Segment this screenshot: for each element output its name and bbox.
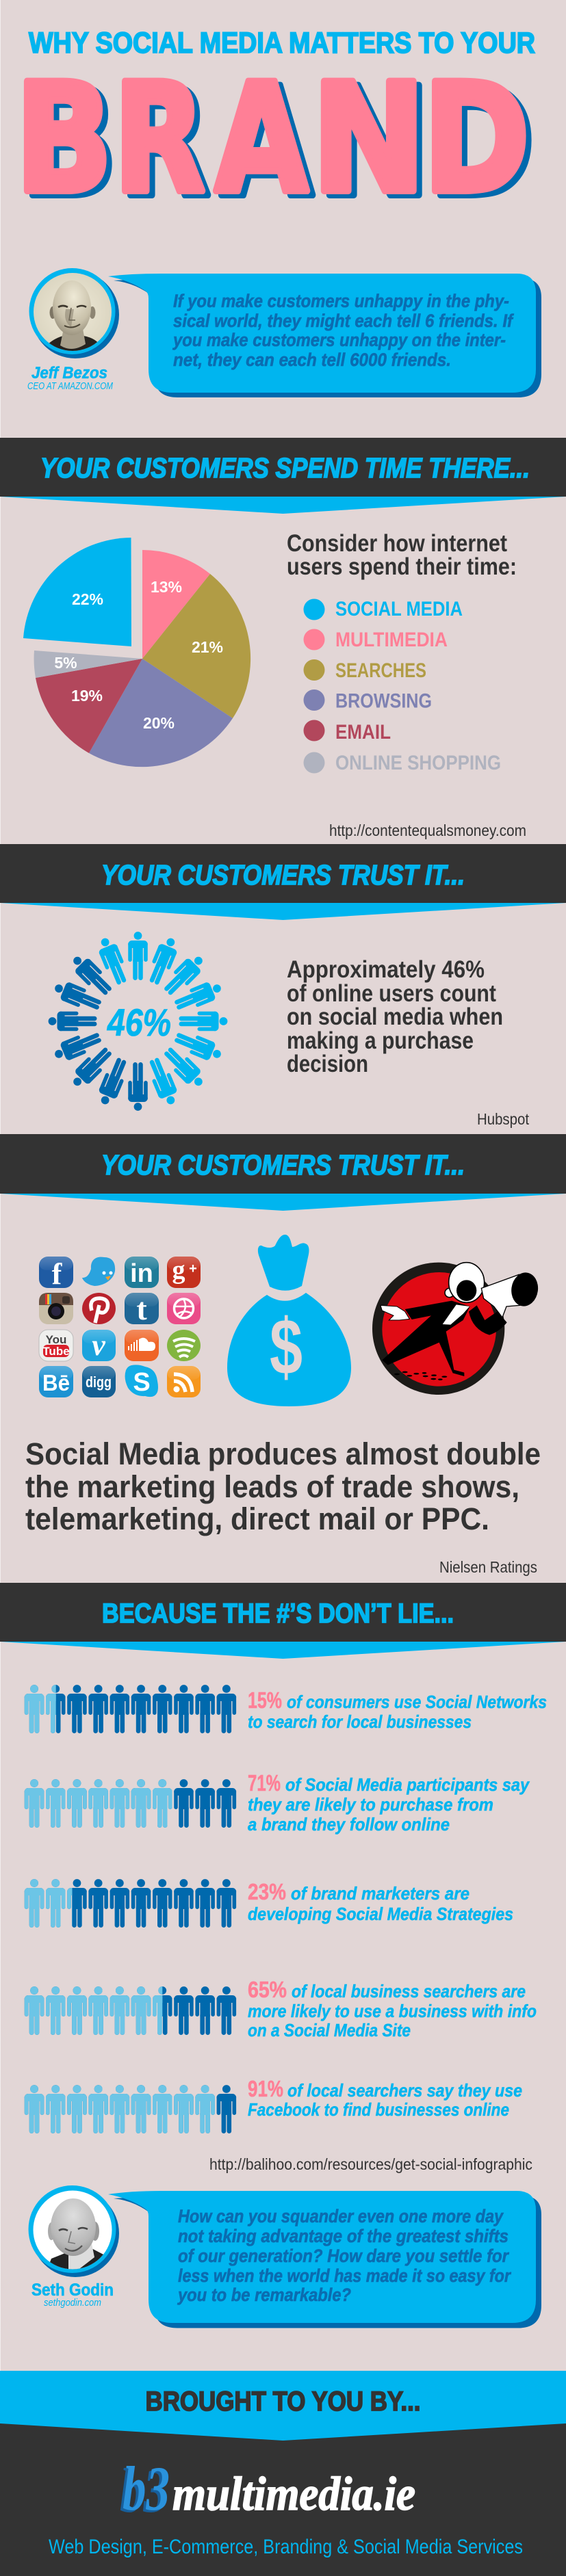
section header: because the numbers: BECAUSE THE #’S DON’T LIE...: [102, 1599, 454, 1629]
heading: consider how users spend time: users spend their time:: [287, 553, 517, 580]
icon: facebook: [39, 1257, 73, 1291]
source: Nielsen Ratings: Nielsen Ratings: [439, 1558, 537, 1576]
source: Hubspot: Hubspot: [477, 1110, 530, 1128]
icon: facebook: f: [52, 1257, 63, 1291]
icon: youtube: Tube: [42, 1345, 70, 1358]
stat row: 91%: Facebook to find businesses online: [248, 2099, 509, 2120]
icon: soundcloud: [125, 1330, 159, 1361]
text: 46% of online users: decision: [287, 1051, 368, 1077]
icon: behance: [39, 1366, 73, 1397]
speech bubble: Bezos quote: sical world, they might each tell 6 friends. If: [173, 311, 515, 331]
title: BRAND: D: [423, 52, 530, 227]
source: contentequalsmoney: http://contentequalsmoney.com: [329, 822, 526, 839]
icon: skype: S: [133, 1368, 151, 1397]
speech bubble: Godin quote: How can you squander even one more day: [178, 2206, 504, 2226]
icon: google plus: g: [172, 1256, 185, 1285]
name: Seth Godin: sethgodin.com: [44, 2297, 101, 2309]
speech bubble: Bezos quote: net, they can each tell 6000 friends.: [173, 350, 451, 370]
stat row: 65%: on a Social Media Site: [248, 2020, 411, 2040]
title: BRAND: [15, 51, 535, 231]
text: 46% of online users: of online users count: [287, 980, 496, 1007]
icon: digg: [82, 1366, 116, 1397]
pie chart: 19%: [71, 687, 103, 705]
icon: digg: digg: [86, 1374, 112, 1391]
icon: money bag: [227, 1235, 351, 1406]
stat row: 15%: [25, 1685, 547, 1733]
text: 46% of online users: on social media when: [287, 1003, 503, 1030]
pie chart: 20%: [143, 714, 175, 732]
section header: because the numbers: [0, 1583, 566, 1659]
title: BRAND: B: [21, 55, 118, 231]
source: balihoo: http://balihoo.com/resources/get-social-infographic: [209, 2155, 532, 2173]
icon grid: social networks: [39, 1256, 201, 1397]
icon: pinterest: [82, 1293, 116, 1324]
name: Jeff Bezos: [27, 364, 113, 392]
title: BRAND: N: [317, 55, 432, 231]
stat row: 65%: [25, 1981, 537, 2037]
text: 46% of online users: [287, 956, 503, 1077]
pie chart: 22%: [72, 590, 103, 608]
speech bubble: Bezos quote: you make customers unhappy on the inter-: [172, 330, 506, 350]
heading: consider how users spend time: [287, 530, 517, 580]
portrait: Jeff Bezos: [29, 268, 119, 358]
heading: consider how users spend time: Consider how internet: [287, 530, 507, 557]
stat row: 91%: 91%: [248, 2076, 283, 2101]
title: BRAND: A: [215, 51, 308, 226]
people ring: 46%: 46%: [107, 1001, 171, 1044]
section header: customers trust it (2): YOUR CUSTOMERS TRUST IT...: [101, 1149, 465, 1181]
stat row: 91%: [25, 2076, 522, 2133]
footer banner: brought to you by: [0, 2371, 566, 2576]
name: Seth Godin: Seth Godin: [31, 2281, 114, 2300]
title: BRAND: D: [428, 56, 535, 231]
logo: b3 multimedia: multimedia.ie: [172, 2468, 415, 2521]
name: Jeff Bezos: CEO AT AMAZON.COM: [27, 380, 113, 392]
section header: customers trust it (1): YOUR CUSTOMERS TRUST IT...: [101, 859, 465, 891]
logo: b3 multimedia: b3: [120, 2456, 167, 2525]
text: double the marketing leads: telemarketing, direct mail or PPC.: [25, 1501, 489, 1536]
title: BRAND: R: [114, 51, 205, 226]
icon: vimeo: v: [92, 1328, 105, 1362]
icon: spotify: [167, 1330, 201, 1361]
legend: BROWSING: [335, 689, 432, 713]
logo: b3 multimedia: b3: [123, 2454, 170, 2523]
text: double the marketing leads: Social Media produces almost double: [25, 1436, 541, 1471]
text: double the marketing leads: [25, 1436, 541, 1536]
stat row: 23%: developing Social Media Strategies: [248, 1904, 513, 1924]
pie chart: 21%: [192, 638, 223, 656]
text: 46% of online users: making a purchase: [287, 1027, 474, 1054]
icon: rss: [167, 1366, 201, 1397]
title: BRAND: R: [119, 55, 211, 231]
icon: tumblr: t: [136, 1291, 147, 1326]
stat row: 91%: of local searchers say they use: [287, 2080, 522, 2101]
icon: behance: Bē: [42, 1370, 70, 1395]
speech bubble: Godin quote: you to be remarkable?: [177, 2285, 351, 2305]
text: 46% of online users: Approximately 46%: [287, 956, 485, 983]
speech bubble: Bezos quote: If you make customers unhappy in the phy-: [173, 291, 509, 311]
stat row: 71%: 71%: [248, 1770, 281, 1796]
icon: tumblr: [125, 1291, 159, 1326]
title: BRAND: B: [15, 51, 113, 227]
speech bubble: Godin quote: less when the world has made it so easy for: [178, 2265, 511, 2286]
stat row: 65%: 65%: [248, 1977, 287, 2002]
icon: instagram: [39, 1293, 73, 1324]
icon: linkedin: in: [130, 1259, 153, 1288]
legend: [304, 598, 501, 774]
stat row: 71%: [25, 1770, 530, 1835]
stat row: 23%: 23%: [248, 1879, 286, 1904]
people ring: 46%: [49, 932, 227, 1111]
portrait: Seth Godin: [29, 2185, 119, 2277]
icon: vimeo: [82, 1328, 116, 1362]
title: BRAND: N: [311, 51, 426, 226]
section header: customers spend time: [0, 438, 566, 514]
legend: SOCIAL MEDIA: [335, 598, 463, 620]
speech bubble: Godin quote: of our generation? How dare you settle for: [178, 2246, 509, 2266]
legend: SEARCHES: [335, 659, 426, 682]
stat row: 23%: [25, 1879, 513, 1928]
speech bubble: Godin quote: [108, 2191, 541, 2328]
stat row: 23%: of brand marketers are: [291, 1883, 469, 1904]
icon: skype: [125, 1365, 158, 1397]
icon: google plus: +: [189, 1261, 197, 1276]
stat row: 71%: of Social Media participants say: [285, 1774, 530, 1795]
stat row: 15%: to search for local businesses: [248, 1711, 472, 1732]
speech bubble: Bezos quote: [108, 274, 541, 397]
stat row: 71%: a brand they follow online: [248, 1814, 450, 1835]
legend: MULTIMEDIA: [335, 629, 448, 651]
name: Jeff Bezos: Jeff Bezos: [31, 364, 107, 382]
speech bubble: Godin quote: not taking advantage of the greatest shifts: [178, 2226, 509, 2246]
pie chart: 5%: [54, 654, 77, 672]
stat row: 65%: more likely to use a business with info: [248, 2001, 537, 2021]
section header: customers trust it (2): [0, 1134, 566, 1211]
logo: b3 multimedia: [120, 2454, 415, 2525]
pie chart: [23, 538, 250, 767]
stat row: 65%: of local business searchers are: [292, 1981, 526, 2001]
stat row: 71%: they are likely to purchase from: [248, 1794, 493, 1815]
title: BRAND: A: [220, 55, 313, 231]
name: Seth Godin: [31, 2281, 114, 2309]
icon: google plus: [167, 1256, 201, 1288]
icon: money bag: $: [270, 1302, 303, 1391]
icon: youtube: [39, 1330, 73, 1361]
text: double the marketing leads: the marketing leads of trade shows,: [25, 1469, 519, 1504]
section header: customers trust it (1): [0, 844, 566, 920]
stat row: 15%: 15%: [248, 1687, 282, 1713]
icon: linkedin: [125, 1257, 159, 1288]
icon: youtube: You: [46, 1333, 66, 1346]
icon: twitter bird: [82, 1257, 115, 1286]
legend: ONLINE SHOPPING: [335, 752, 501, 774]
icon: dribbble: [167, 1293, 201, 1324]
legend: EMAIL: [335, 721, 391, 744]
icon: man shouting through megaphone: [372, 1263, 540, 1395]
footer banner: brought to you by: BROUGHT TO YOU BY...: [145, 2387, 420, 2417]
pie chart: 13%: [151, 578, 182, 596]
